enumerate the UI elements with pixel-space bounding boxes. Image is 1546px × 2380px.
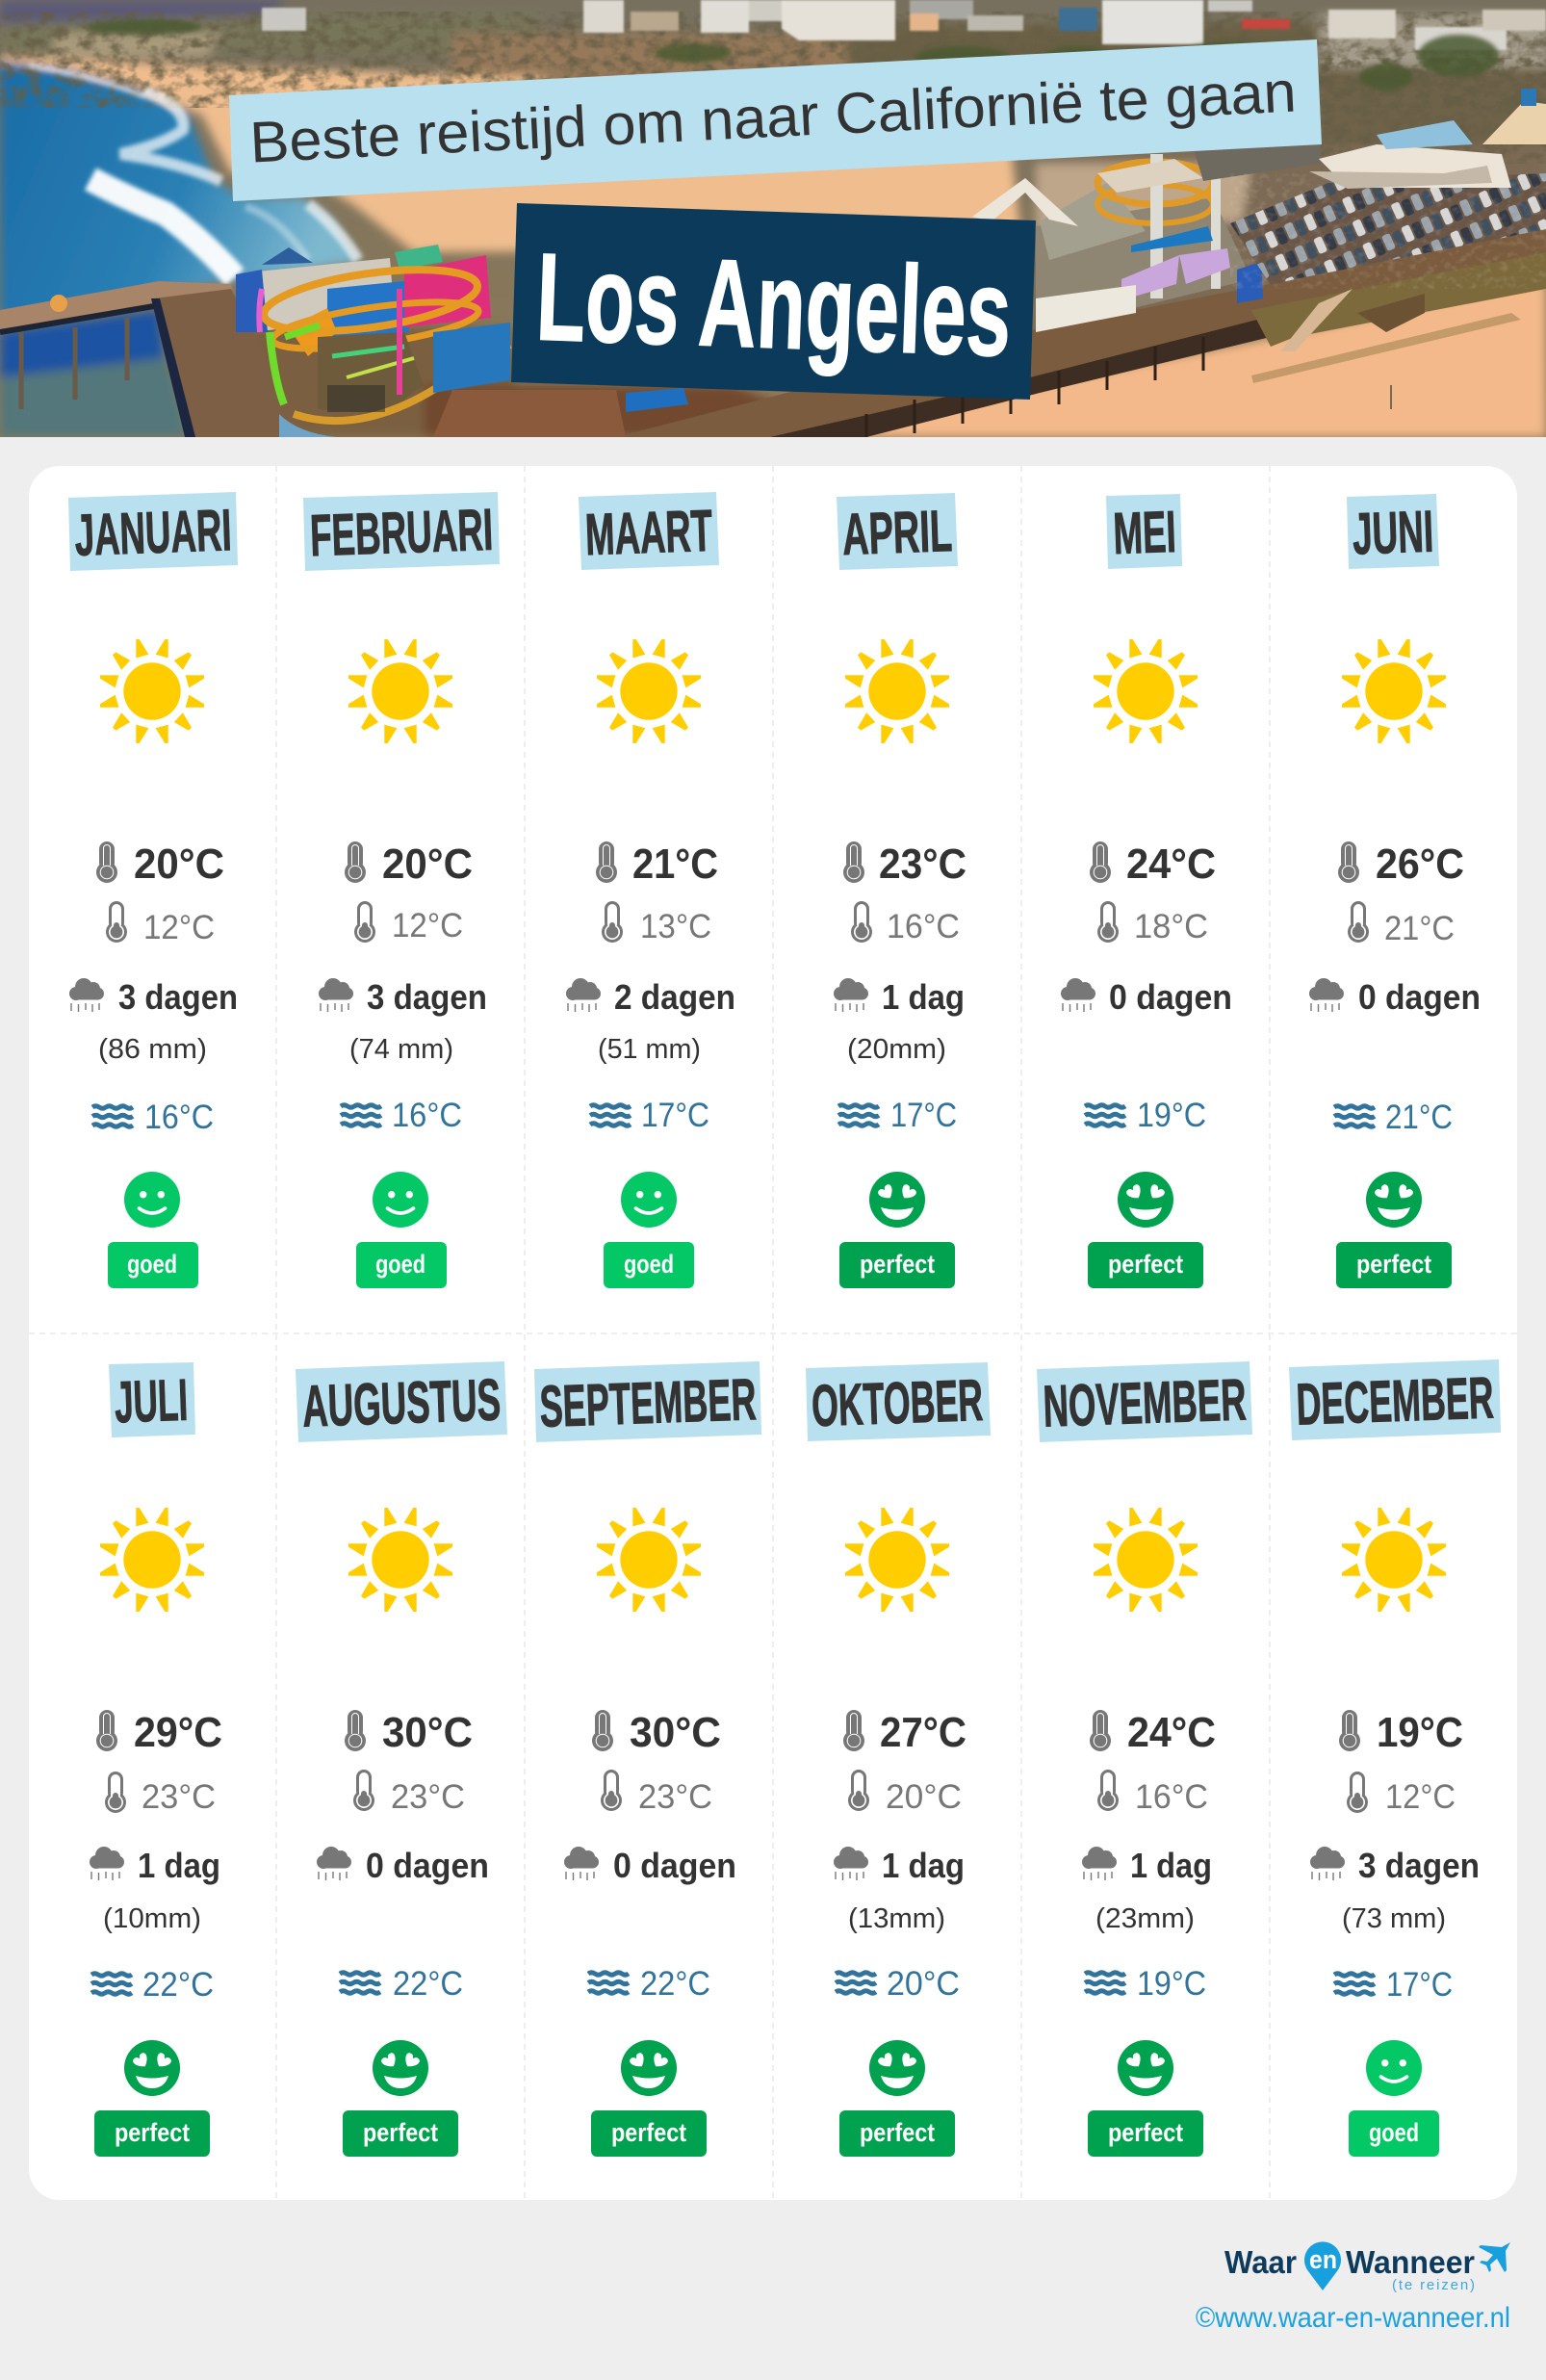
icon: smiley [1366, 2040, 1422, 2096]
icon: thermometer max [592, 1710, 613, 1751]
sand [0, 56, 1020, 252]
label: april: APRIL [841, 498, 953, 567]
max temperature: 24°C [1126, 841, 1216, 888]
rain days: 0 dagen [366, 1846, 489, 1885]
rating: goed: goed [375, 1250, 425, 1279]
icon: map pin: en [1309, 2245, 1337, 2274]
icon: thermometer min [105, 1772, 126, 1813]
heading: Los Angeles [511, 203, 1036, 400]
icon: rain cloud [1061, 978, 1095, 1012]
rides right [1036, 197, 1251, 332]
label: januari: JANUARI [73, 497, 233, 568]
rating: goed: goed [624, 1250, 674, 1279]
rating: perfect [94, 2110, 210, 2157]
icon: rain cloud [564, 1847, 599, 1880]
ocean [0, 62, 361, 318]
icon: thermometer max [843, 1710, 864, 1751]
icon: thermometer min [1347, 1772, 1368, 1813]
rainfall: (51 mm) [598, 1034, 701, 1065]
icon: rain cloud [90, 1847, 124, 1880]
icon: sun [597, 1508, 701, 1612]
label: augustus [296, 1361, 507, 1442]
rain days: 3 dagen [1358, 1846, 1480, 1885]
sea temperature: 22°C [640, 1965, 710, 2003]
max temperature: 19°C [1377, 1709, 1463, 1756]
min temperature: 13°C [640, 908, 711, 945]
rain days: 1 dag [882, 1846, 965, 1885]
icon: waves [588, 1973, 629, 1993]
icon: thermometer max [1090, 1710, 1111, 1751]
label: november [1037, 1361, 1252, 1442]
month: september [534, 1361, 761, 2157]
icon: smiley [621, 2040, 677, 2096]
icon: rain cloud [1310, 1847, 1345, 1880]
label: november: NOVEMBER [1042, 1366, 1248, 1439]
icon: thermometer min [354, 901, 375, 943]
rain days: 3 dagen [367, 977, 487, 1017]
label: juni: JUNI [1352, 499, 1434, 566]
title banner: Beste reistijd om naar Californië te gaan [248, 59, 1298, 175]
icon: sun [348, 1508, 452, 1612]
label: mei [1106, 494, 1182, 569]
rainfall: (23mm) [1095, 1903, 1195, 1934]
icon: thermometer max [1339, 1710, 1360, 1751]
min temperature: 12°C [143, 909, 215, 946]
rating: perfect: perfect [611, 2118, 686, 2147]
parking lot cars [1230, 173, 1546, 285]
icon: smiley [1366, 1172, 1422, 1228]
icon: waves [1334, 1106, 1375, 1126]
min temperature: 23°C [142, 1778, 216, 1816]
left rides ground [231, 327, 520, 437]
icon: waves [91, 1974, 132, 1994]
right ground [1030, 144, 1546, 347]
min temperature: 20°C [886, 1778, 962, 1816]
city mottling [0, 12, 1546, 108]
sea temperature: 19°C [1137, 1097, 1206, 1134]
icon: waves [590, 1105, 631, 1125]
rain days: 1 dag [138, 1846, 220, 1885]
rating: perfect [1088, 1242, 1203, 1288]
icon: thermometer min [1348, 901, 1369, 943]
icon: sun [1094, 1508, 1198, 1612]
icon: thermometer max [1090, 841, 1111, 883]
icon: thermometer max [596, 841, 617, 883]
header photo: Santa Monica pier [0, 0, 1546, 437]
copyright url: ©www.waar-en-wanneer.nl [1196, 2302, 1510, 2334]
panel: climate table card [29, 466, 1517, 2200]
logo: Waar en Wanneer: (te reizen) [1392, 2277, 1475, 2293]
icon: rain cloud [319, 978, 353, 1012]
icon: smiley [124, 2040, 180, 2096]
icon: plane [1479, 2242, 1510, 2272]
icon: sun [100, 639, 204, 743]
icon: thermometer min [1097, 1770, 1119, 1811]
rating: perfect [1336, 1242, 1452, 1288]
max temperature: 30°C [382, 1709, 473, 1756]
rating: goed [356, 1242, 447, 1288]
icon: waves [1334, 1974, 1375, 1994]
icon: map pin [1304, 2241, 1341, 2290]
icon: smiley [869, 2040, 925, 2096]
rain days: 1 dag [882, 977, 965, 1017]
sea temperature: 17°C [1386, 1966, 1453, 2004]
month: juni [1309, 494, 1481, 1288]
rainfall: (86 mm) [98, 1034, 207, 1065]
icon: thermometer min [1097, 901, 1119, 943]
max temperature: 30°C [630, 1709, 721, 1756]
max temperature: 26°C [1376, 841, 1464, 888]
icon: smiley [373, 2040, 428, 2096]
sea temperature: 17°C [641, 1097, 709, 1134]
rating: perfect: perfect [1108, 1250, 1183, 1279]
icon: waves [340, 1973, 380, 1993]
min temperature: 18°C [1134, 908, 1208, 945]
icon: smiley [869, 1172, 925, 1228]
min temperature: 21°C [1384, 910, 1455, 947]
logo: Waar en Wanneer [1224, 2241, 1510, 2293]
min temperature: 23°C [638, 1778, 712, 1816]
rides left [262, 258, 392, 330]
rating: perfect [839, 1242, 955, 1288]
label: juli: JULI [114, 1367, 189, 1435]
icon: thermometer min [353, 1770, 374, 1811]
rating: perfect [343, 2110, 458, 2157]
rating: perfect [839, 2110, 955, 2157]
label: maart [579, 492, 719, 570]
max temperature: 24°C [1127, 1709, 1216, 1756]
icon: rain cloud [834, 978, 868, 1012]
label: september: SEPTEMBER [538, 1366, 758, 1439]
icon: rain cloud [566, 978, 601, 1012]
rainfall: (73 mm) [1342, 1903, 1446, 1934]
icon: sun [845, 639, 949, 743]
icon: waves [838, 1105, 879, 1125]
max temperature: 29°C [134, 1709, 222, 1756]
under pier water [0, 308, 188, 437]
rating: perfect: perfect [1356, 1250, 1431, 1279]
heading: Los Angeles: Los Angeles [534, 227, 1014, 383]
surf foam [29, 65, 358, 277]
label: februari [303, 492, 500, 571]
month: augustus [296, 1361, 507, 2157]
label: februari: FEBRUARI [309, 497, 494, 568]
icon: thermometer min [851, 901, 872, 943]
icon: thermometer max [96, 841, 117, 883]
icon: thermometer max [96, 1710, 117, 1751]
label: september [534, 1361, 761, 1442]
min temperature: 12°C [1385, 1778, 1456, 1816]
max temperature: 23°C [879, 841, 966, 888]
rain days: 0 dagen [1358, 977, 1481, 1017]
icon: thermometer min [848, 1770, 869, 1811]
pier walkway [0, 281, 236, 329]
max temperature: 21°C [632, 841, 718, 888]
rain days: 0 dagen [1109, 977, 1232, 1017]
icon: sun [348, 639, 452, 743]
rating: goed [1349, 2110, 1439, 2157]
icon: sun [1342, 1508, 1446, 1612]
month: mei [1061, 494, 1232, 1288]
rating: goed [108, 1242, 198, 1288]
sea temperature: 16°C [392, 1097, 462, 1134]
buildings [262, 0, 1546, 50]
label: oktober: OKTOBER [811, 1367, 984, 1438]
rating: goed: goed [127, 1250, 177, 1279]
sea temperature: 20°C [887, 1965, 960, 2003]
min temperature: 12°C [392, 907, 463, 944]
icon: waves [1085, 1105, 1125, 1125]
month: januari [68, 492, 238, 1288]
rating: goed: goed [1369, 2118, 1419, 2147]
icon: waves [341, 1105, 381, 1125]
rating: goed [604, 1242, 694, 1288]
rain days: 2 dagen [614, 977, 735, 1017]
sea temperature: 17°C [890, 1097, 957, 1134]
icon: thermometer max [843, 841, 864, 883]
label: maart: MAART [584, 498, 713, 567]
icon: smiley [1118, 1172, 1173, 1228]
right building and tent [1319, 144, 1511, 188]
rainfall: (10mm) [103, 1903, 201, 1934]
label: januari [68, 492, 238, 571]
icon: waves [92, 1106, 133, 1126]
icon: rain cloud [834, 1847, 868, 1880]
label: juli [109, 1362, 195, 1437]
rain days: 1 dag [1130, 1846, 1212, 1885]
icon: rain cloud [317, 1847, 351, 1880]
icon: waves [1085, 1973, 1125, 1993]
rating: perfect: perfect [1108, 2118, 1183, 2147]
icon: smiley [621, 1172, 677, 1228]
icon: thermometer min [106, 901, 127, 943]
icon: rain cloud [1309, 978, 1344, 1012]
icon: rain cloud [1082, 1847, 1117, 1880]
icon: rain cloud [69, 978, 104, 1012]
rain days: 3 dagen [118, 977, 238, 1017]
label: augustus: AUGUSTUS [301, 1366, 502, 1439]
rating: perfect: perfect [115, 2118, 190, 2147]
month: maart [566, 492, 735, 1288]
icon: thermometer max [345, 1710, 366, 1751]
icon: sun [845, 1508, 949, 1612]
min temperature: 16°C [887, 908, 960, 945]
icon: smiley [124, 1172, 180, 1228]
icon: sun [100, 1508, 204, 1612]
month: december [1289, 1359, 1501, 2157]
icon: sun [1342, 639, 1446, 743]
month: april [834, 493, 966, 1288]
icon: thermometer min [602, 901, 623, 943]
icon: thermometer max [345, 841, 366, 883]
icon: smiley [373, 1172, 428, 1228]
month: november [1037, 1361, 1252, 2157]
min temperature: 23°C [391, 1778, 465, 1816]
sea temperature: 22°C [142, 1966, 214, 2004]
rating: perfect [591, 2110, 707, 2157]
label: april [837, 493, 958, 570]
rating: perfect: perfect [363, 2118, 438, 2147]
month: februari [303, 492, 500, 1288]
max temperature: 20°C [382, 841, 473, 888]
max temperature: 20°C [134, 841, 224, 888]
sea temperature: 22°C [393, 1965, 463, 2003]
min temperature: 16°C [1135, 1778, 1208, 1816]
rain days: 0 dagen [613, 1846, 736, 1885]
logo: Waar en Wanneer: Wanneer [1346, 2244, 1475, 2280]
rating: perfect: perfect [860, 1250, 935, 1279]
label: oktober [806, 1362, 991, 1441]
max temperature: 27°C [880, 1709, 966, 1756]
label: mei: MEI [1112, 499, 1177, 566]
title banner [229, 39, 1322, 201]
sea temperature: 21°C [1385, 1099, 1453, 1136]
logo: Waar en Wanneer: Waar [1224, 2244, 1297, 2280]
sea temperature: 16°C [144, 1099, 214, 1136]
icon: thermometer max [1338, 841, 1359, 883]
icon: sun [1094, 639, 1198, 743]
rating: perfect [1088, 2110, 1203, 2157]
icon: smiley [1118, 2040, 1173, 2096]
rainfall: (13mm) [848, 1903, 945, 1934]
month: oktober [806, 1362, 991, 2157]
icon: thermometer min [601, 1770, 622, 1811]
sea temperature: 19°C [1137, 1965, 1206, 2003]
rainfall: (74 mm) [349, 1034, 453, 1065]
rating: perfect: perfect [860, 2118, 935, 2147]
icon: sun [597, 639, 701, 743]
label: juni [1347, 494, 1439, 569]
icon: waves [836, 1973, 876, 1993]
month: juli [90, 1362, 222, 2157]
rainfall: (20mm) [847, 1034, 946, 1065]
pier deck and wall [616, 229, 1546, 437]
